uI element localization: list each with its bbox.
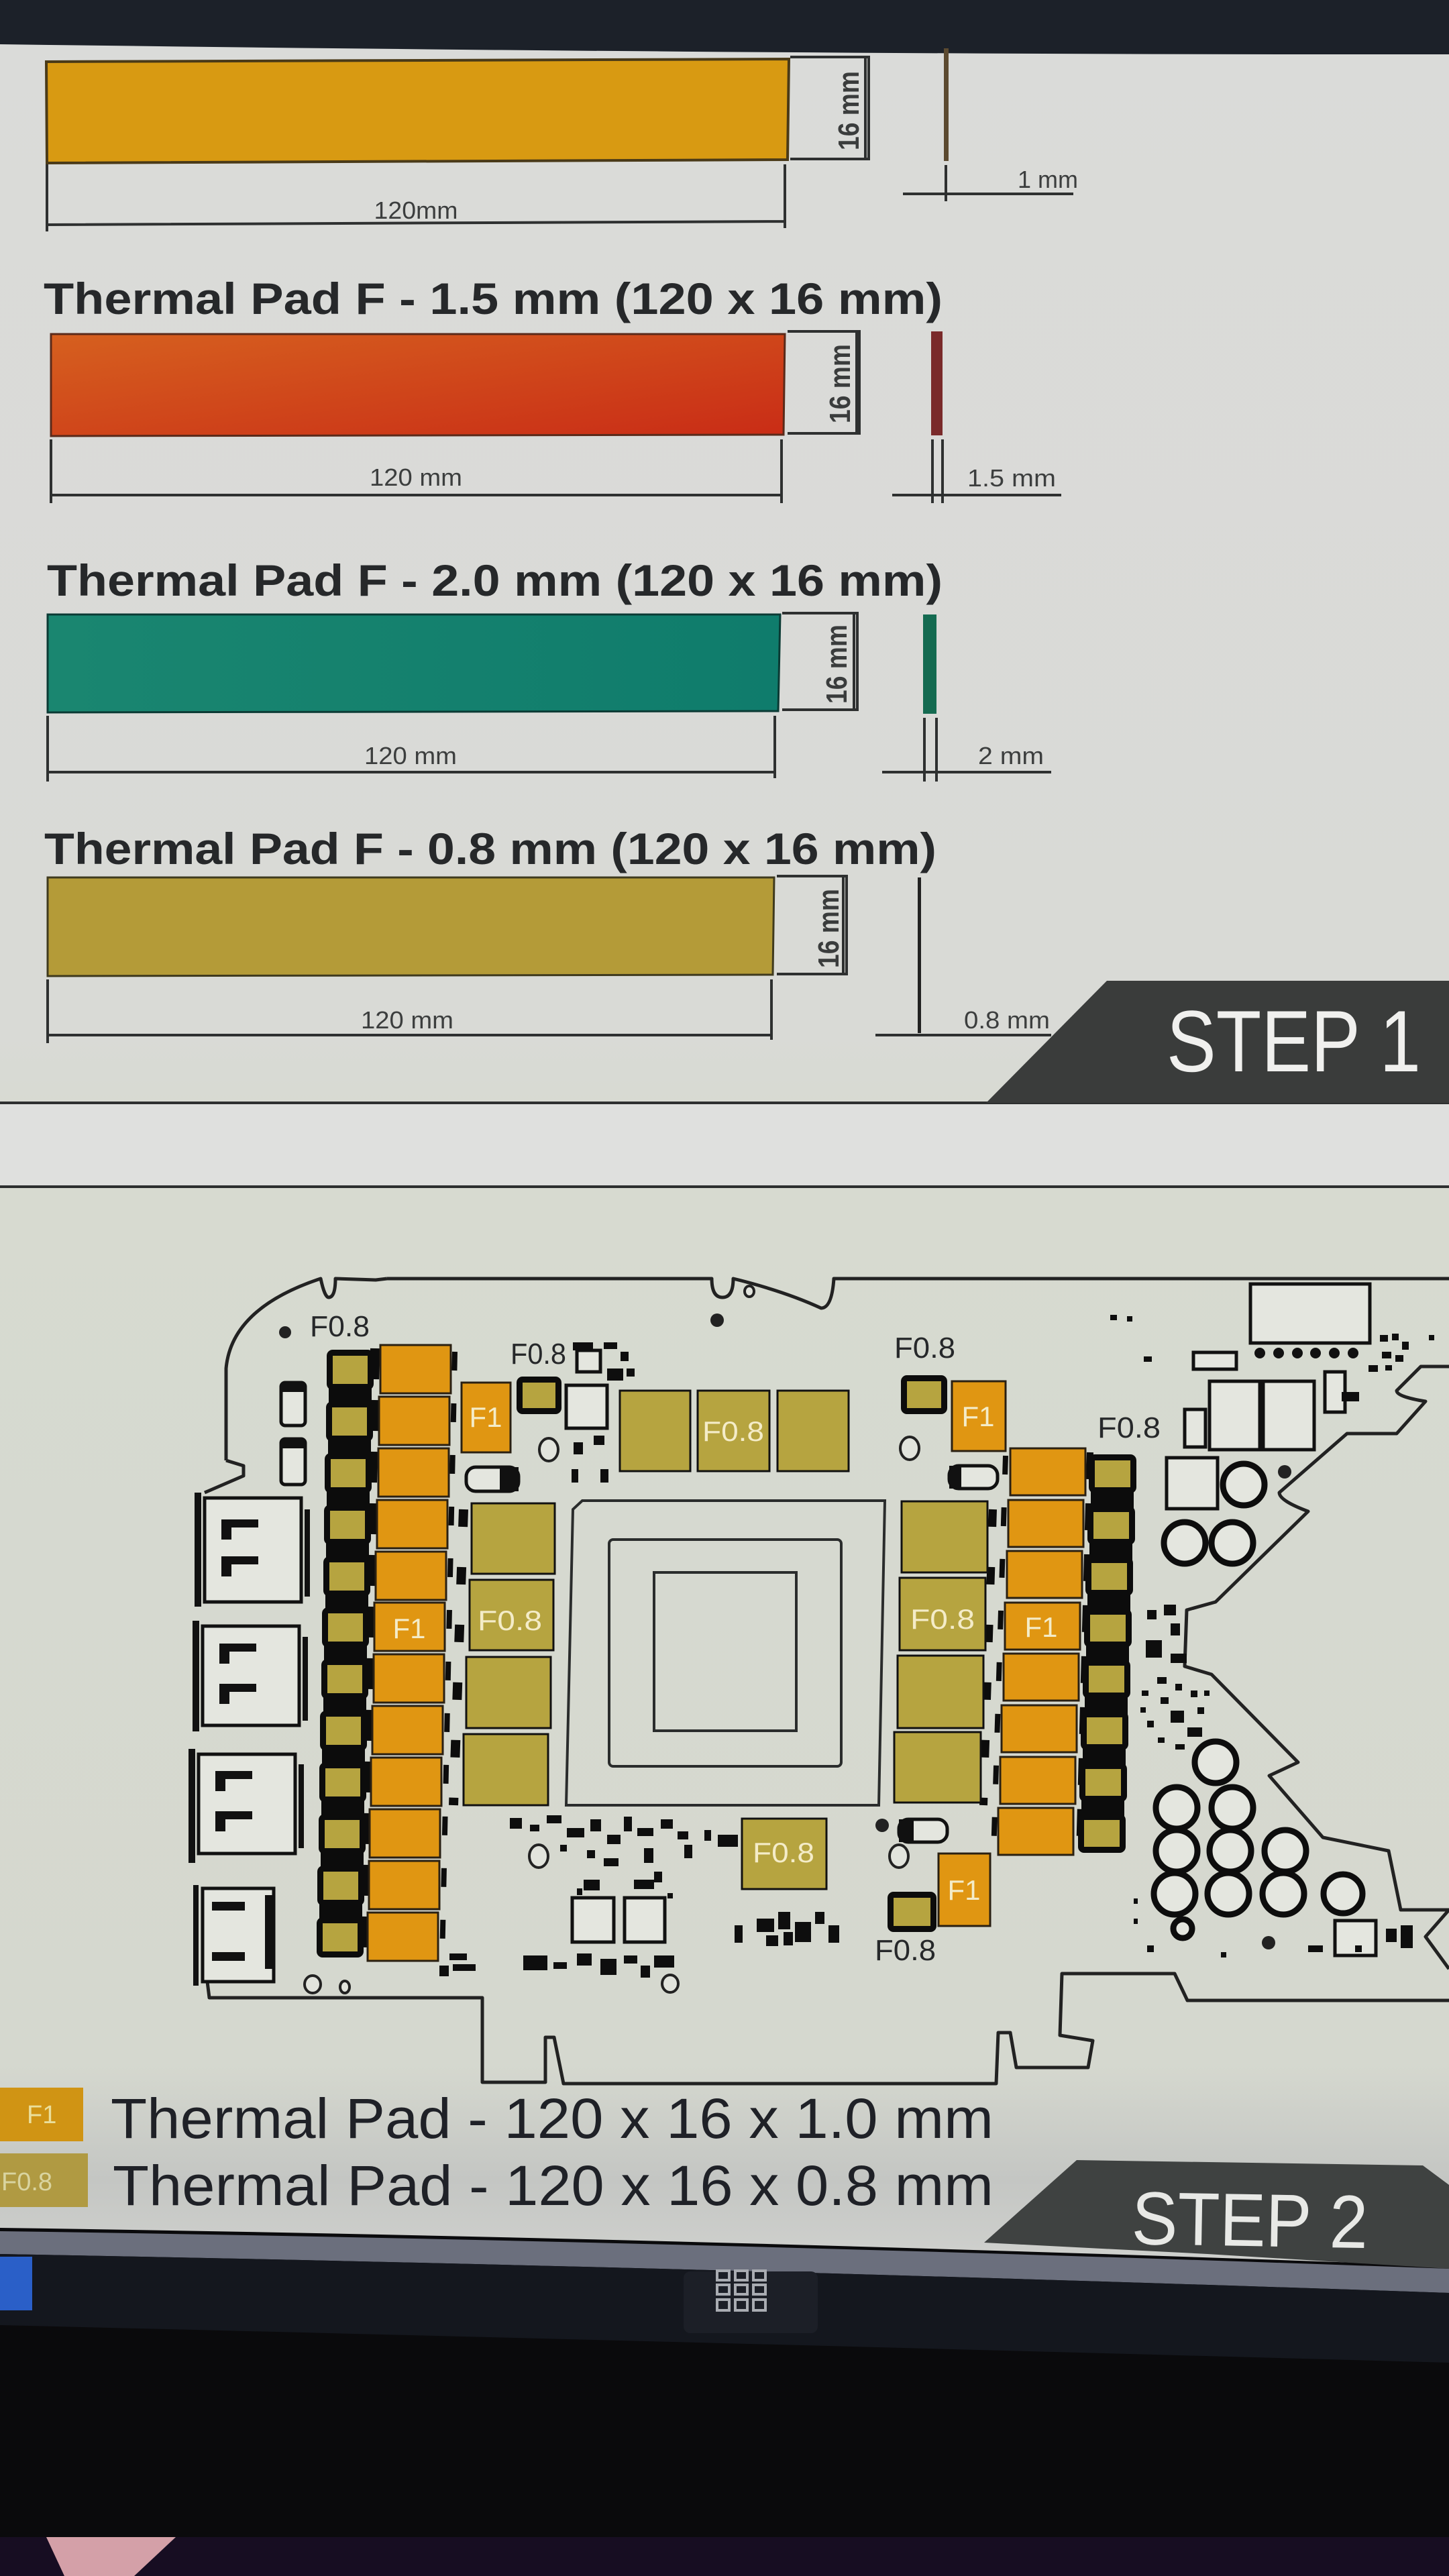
GPU outline	[566, 1501, 885, 1805]
width label: 120 mm	[370, 464, 462, 491]
heading: 2.0 mm: Thermal Pad F - 2.0 mm (120 x 16 mm)	[47, 555, 943, 605]
width dimension	[48, 716, 775, 782]
bottom F1 pad	[938, 1854, 990, 1926]
section band between steps	[0, 1102, 1449, 1188]
upper right connector and capacitors	[1164, 1284, 1370, 1564]
taskbar blue app icon	[0, 2257, 32, 2310]
left small pad column	[319, 1356, 372, 1951]
top F1 pad	[462, 1383, 511, 1452]
bottom F0.8 pad: F0.8	[753, 1837, 814, 1868]
F0.8 callouts: F0.8	[310, 1310, 370, 1343]
height dimension	[790, 57, 869, 159]
pad swatch	[48, 877, 774, 976]
height label: 16 mm	[833, 71, 865, 150]
dark vias	[279, 1313, 1291, 1949]
pad spec: 2.0 mm	[48, 613, 1051, 782]
small F0.8 pad top right	[907, 1381, 941, 1408]
top row F0.8 pads: F0.8	[702, 1415, 764, 1447]
bottom F1 pad: F1	[947, 1874, 981, 1906]
heading: 0.8 mm: Thermal Pad F - 0.8 mm (120 x 16 mm)	[44, 824, 936, 873]
right F1 pad column: F1	[1024, 1611, 1058, 1643]
white components bottom	[572, 1466, 1376, 1955]
thickness bar	[931, 331, 943, 435]
bottom F0.8 pad	[742, 1819, 826, 1889]
heading: 1.5 mm: Thermal Pad F - 1.5 mm (120 x 16 mm)	[44, 274, 943, 323]
width dimension	[47, 164, 785, 231]
tab: step 2	[984, 2160, 1449, 2269]
top dark bezel	[0, 0, 1449, 54]
solder specks	[439, 1315, 1434, 1978]
width label: 120mm	[374, 197, 458, 224]
board outline	[205, 1279, 1449, 2084]
height dimension	[777, 876, 847, 974]
thickness label: 1.5 mm	[967, 464, 1056, 492]
pad swatch	[48, 614, 780, 712]
legend text F1: Thermal Pad - 120 x 16 x 1.0 mm	[111, 2087, 994, 2150]
height label: 16 mm	[820, 625, 853, 704]
height label: 16 mm	[812, 889, 845, 968]
thickness bar	[944, 48, 949, 161]
legend swatch F0.8	[0, 2153, 88, 2207]
small F0.8 pad top	[523, 1383, 555, 1408]
F0.8 callouts: F0.8	[511, 1338, 566, 1371]
black solder strips	[363, 1348, 1090, 1962]
capacitor cluster	[1154, 1741, 1362, 1938]
thickness dimension	[892, 439, 1061, 503]
thickness dimension	[903, 165, 1073, 201]
white components top	[566, 1350, 607, 1428]
display port 1	[195, 1493, 310, 1607]
legend swatch F1: F1	[27, 2101, 56, 2129]
mounting holes	[305, 1286, 919, 1993]
monitor bottom bezel and lower area	[0, 2228, 1449, 2576]
F0.8 callouts: F0.8	[894, 1332, 955, 1364]
thickness label: 0.8 mm	[964, 1006, 1050, 1034]
height dimension	[788, 331, 859, 433]
top F1 pad: F1	[469, 1401, 502, 1433]
pad spec: 0.8 mm	[48, 876, 1051, 1043]
legend text F0.8: Thermal Pad - 120 x 16 x 0.8 mm	[113, 2154, 994, 2217]
right small pad column	[1081, 1460, 1134, 1847]
thickness bar	[923, 614, 936, 714]
taskbar launcher	[684, 2271, 818, 2333]
thickness label: 1 mm	[1018, 166, 1078, 193]
F1 label: F1	[392, 1613, 426, 1644]
display port 2	[193, 1621, 308, 1731]
width label: 120 mm	[364, 742, 457, 769]
hdmi port	[193, 1885, 274, 1986]
small F0.8 pad bottom	[894, 1898, 930, 1926]
right F1 pad column	[998, 1448, 1085, 1855]
left-centre F0.8 stack	[464, 1503, 555, 1805]
display port 3	[189, 1749, 304, 1863]
legend	[0, 2087, 994, 2217]
width dimension	[48, 979, 771, 1043]
right-centre F0.8 stack	[894, 1501, 987, 1803]
F0.8 callouts: F0.8	[875, 1934, 936, 1967]
width dimension	[51, 439, 782, 503]
F0.8 callouts: F0.8	[1097, 1411, 1161, 1444]
finger	[46, 2537, 176, 2576]
pad spec: 1.5 mm	[51, 331, 1061, 503]
top right F1 pad: F1	[961, 1401, 995, 1432]
circuit board diagram	[189, 1279, 1449, 2084]
small components left	[281, 1383, 519, 1491]
pad spec: 1.0 mm	[46, 48, 1078, 231]
top row F0.8 pads	[620, 1391, 849, 1471]
legend swatch F0.8: F0.8	[1, 2168, 52, 2196]
thickness line	[918, 877, 921, 1033]
thickness label: 2 mm	[978, 742, 1044, 769]
left-centre F0.8 stack: F0.8	[478, 1605, 542, 1636]
desk foreground	[0, 2537, 1449, 2576]
height label: 16 mm	[824, 344, 857, 423]
thickness dimension	[875, 1034, 1051, 1036]
pad swatch	[46, 59, 789, 163]
F0.8 callouts	[310, 1310, 1161, 1967]
left F1 pad column	[368, 1345, 451, 1961]
legend swatch F1	[0, 2088, 83, 2141]
tab: step 1	[986, 981, 1449, 1103]
thickness dimension	[882, 718, 1051, 782]
right-centre F0.8 stack: F0.8	[910, 1603, 975, 1635]
width label: 120 mm	[361, 1006, 453, 1034]
pad swatch	[51, 334, 785, 436]
tab: step 2: STEP 2	[1131, 2176, 1368, 2264]
height dimension	[782, 613, 857, 710]
top right F1 pad	[952, 1381, 1006, 1451]
